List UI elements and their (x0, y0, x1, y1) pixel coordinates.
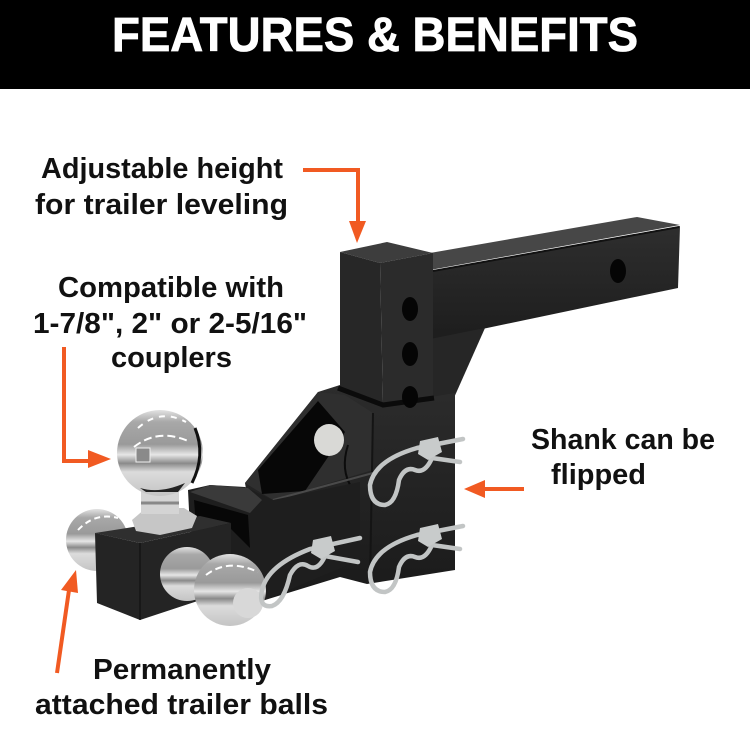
arrow: couplers to top ball (64, 347, 111, 468)
label: coupler compatibility (33, 272, 307, 374)
ball mount block (95, 516, 231, 620)
receiver tube (188, 482, 360, 600)
hitch pin clip lower right (370, 524, 463, 592)
label: permanent trailer balls: attached trailer balls (35, 689, 328, 721)
arrow: balls (57, 570, 78, 673)
hitch pin clip upper (370, 437, 463, 505)
label: adjustable height: for trailer leveling (35, 189, 288, 221)
label: adjustable height: Adjustable height (41, 153, 283, 185)
label: shank flip: Shank can be (531, 424, 715, 456)
label: permanent trailer balls: Permanently (93, 654, 271, 686)
arrow: height to post (303, 170, 366, 243)
title banner (0, 0, 750, 89)
upright post (338, 242, 434, 408)
label: shank flip: flipped (551, 459, 646, 491)
label: shank flip (531, 424, 715, 491)
label: permanent trailer balls (35, 654, 328, 721)
title banner: FEATURES & BENEFITS (112, 9, 638, 62)
label: coupler compatibility: Compatible with (58, 272, 284, 304)
label: adjustable height (35, 153, 288, 221)
shank tube (430, 217, 680, 400)
left trailer ball (66, 509, 128, 571)
lower bracket (245, 385, 455, 600)
label: coupler compatibility: couplers (111, 342, 232, 374)
arrow: shank flip (464, 480, 524, 498)
label: coupler compatibility: 1-7/8", 2" or 2-5/16" (33, 308, 307, 340)
top ball base (132, 488, 197, 535)
hitch pin clip lower left (261, 536, 360, 606)
front trailer balls (160, 547, 266, 626)
hitch mount product illustration (66, 217, 680, 626)
top trailer ball (117, 410, 203, 496)
